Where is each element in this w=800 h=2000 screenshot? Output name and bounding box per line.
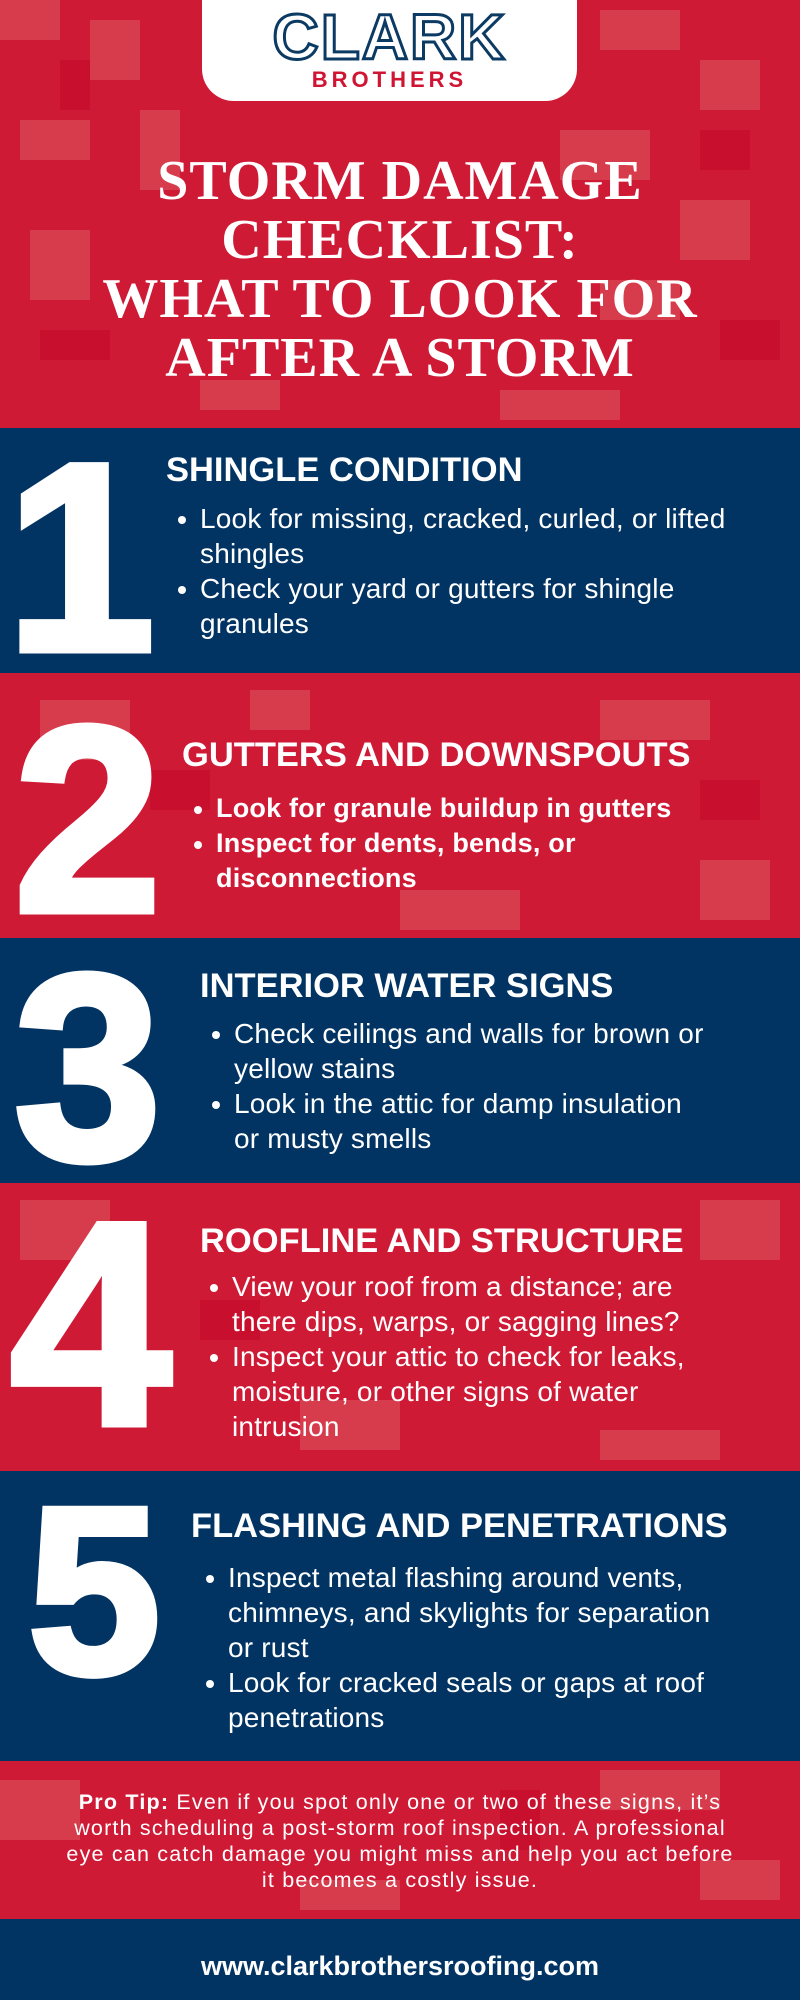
bullets 5 xyxy=(206,1562,710,1733)
pro tip callout: Pro Tip: Even if you spot only one or two of these signs, it’s xyxy=(79,1790,721,1814)
footer xyxy=(0,1919,800,2000)
logo box xyxy=(202,0,577,101)
bullets 5: Inspect metal flashing around vents, xyxy=(228,1562,683,1593)
bullets 5: chimneys, and skylights for separation xyxy=(228,1597,710,1628)
numeral 1: 1 xyxy=(6,407,155,707)
pro tip callout xyxy=(66,1790,734,1892)
title: AFTER A STORM xyxy=(165,327,635,389)
title: WHAT TO LOOK FOR xyxy=(102,268,698,330)
bullets 2: disconnections xyxy=(216,863,417,893)
pro tip callout: it becomes a costly issue. xyxy=(262,1868,538,1892)
logo subtitle: BROTHERS xyxy=(312,67,467,92)
pro tip callout: worth scheduling a post-storm roof inspection. A professional xyxy=(74,1816,726,1840)
bullets 3: Check ceilings and walls for brown or xyxy=(234,1018,704,1049)
panel 5: flashing xyxy=(0,1471,800,1761)
bullets 1: granules xyxy=(200,608,309,639)
bullets 4: moisture, or other signs of water xyxy=(232,1376,639,1407)
bullets 3: yellow stains xyxy=(234,1053,395,1084)
bullets 2: Look for granule buildup in gutters xyxy=(216,793,671,823)
bullets 3: Look in the attic for damp insulation xyxy=(234,1088,682,1119)
bullets 5: Look for cracked seals or gaps at roof xyxy=(228,1667,704,1698)
heading 3: INTERIOR WATER SIGNS xyxy=(200,967,613,1005)
bullets 1: shingles xyxy=(200,538,304,569)
panel 3: interior water xyxy=(0,938,800,1183)
bullets 4: intrusion xyxy=(232,1411,340,1442)
logo wordmark: CLARK xyxy=(273,1,506,73)
bullets 3 xyxy=(212,1018,704,1154)
bullets 3: or musty smells xyxy=(234,1123,431,1154)
panel 1: shingle condition xyxy=(0,428,800,673)
numeral 2: 2 xyxy=(14,672,161,968)
bullets 1 xyxy=(178,503,725,639)
bullets 4: Inspect your attic to check for leaks, xyxy=(232,1341,685,1372)
bullets 5: penetrations xyxy=(228,1702,385,1733)
heading 1: SHINGLE CONDITION xyxy=(166,451,523,489)
numeral 4: 4 xyxy=(10,1162,171,1486)
bullets 2 xyxy=(194,793,671,893)
title xyxy=(102,150,698,389)
bullets 4: View your roof from a distance; are xyxy=(232,1271,673,1302)
bullets 2: Inspect for dents, bends, or xyxy=(216,828,576,858)
bullets 4: there dips, warps, or sagging lines? xyxy=(232,1306,680,1337)
numeral 3: 3 xyxy=(14,920,161,1216)
website url: www.clarkbrothersroofing.com xyxy=(201,1951,599,1981)
title: CHECKLIST: xyxy=(221,209,579,271)
numeral 5: 5 xyxy=(28,1459,160,1724)
heading 5: FLASHING AND PENETRATIONS xyxy=(191,1507,728,1545)
panel 4: roofline xyxy=(10,1162,685,1486)
bullets 4 xyxy=(210,1271,685,1442)
heading 4: ROOFLINE AND STRUCTURE xyxy=(200,1222,684,1260)
panel 2: gutters xyxy=(14,672,691,968)
bullets 1: Check your yard or gutters for shingle xyxy=(200,573,674,604)
pro tip callout: eye can catch damage you might miss and help you act before xyxy=(66,1842,734,1866)
bullets 1: Look for missing, cracked, curled, or lifted xyxy=(200,503,725,534)
heading 2: GUTTERS AND DOWNSPOUTS xyxy=(182,736,691,774)
bullets 5: or rust xyxy=(228,1632,309,1663)
title: STORM DAMAGE xyxy=(157,150,643,212)
